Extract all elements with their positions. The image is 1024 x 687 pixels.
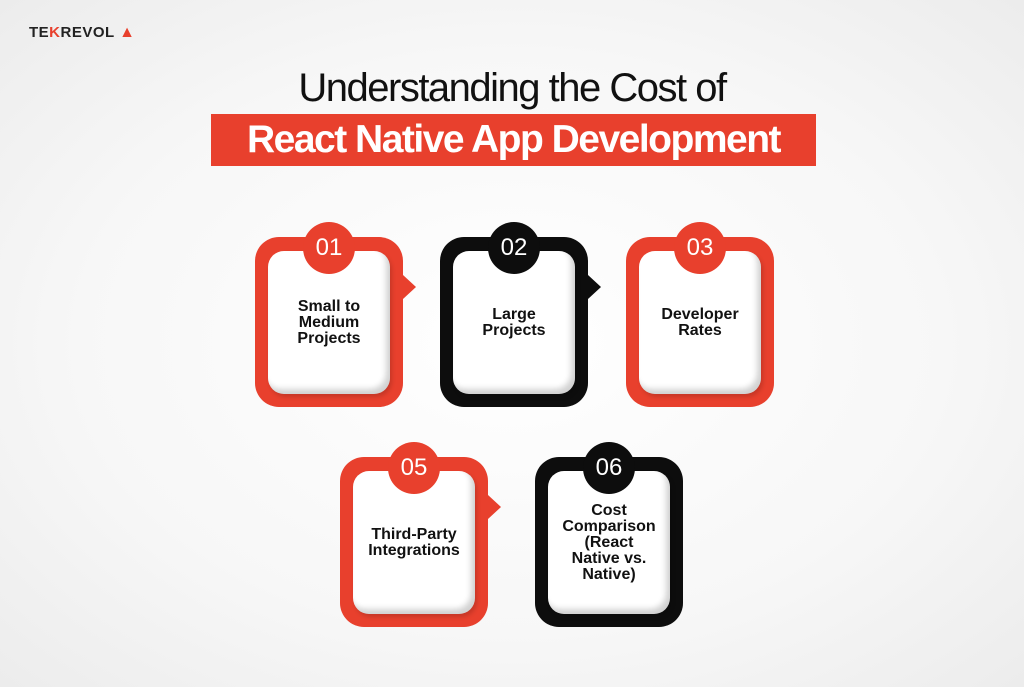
card 05: 05 [401,454,427,481]
title: Understanding the Cost of [298,66,726,110]
logo: TEKREVOL ▲ [29,24,135,41]
card 06: (React [585,534,633,550]
card 02 [440,222,601,407]
card 06: Native) [582,566,636,582]
card 06: Native vs. [572,550,646,566]
card 03: 03 [687,234,713,261]
card 01: Small to [298,298,360,314]
title banner: React Native App Development [247,118,780,161]
card 05: Integrations [368,542,460,558]
card 01: Projects [297,330,361,346]
card 03 [626,222,774,407]
card 06: 06 [596,454,622,481]
card 02: Large [492,306,536,322]
card 06: Cost [591,502,627,518]
card 02: Projects [482,322,546,338]
card 05: Third-Party [371,526,457,542]
card 02: 02 [501,234,527,261]
card 06: Comparison [562,518,656,534]
card 01: 01 [316,234,342,261]
card 01: Medium [299,314,359,330]
card 05 [340,442,501,627]
card 03: Developer [661,306,739,322]
card 01 [255,222,416,407]
card 06 [535,442,683,627]
card 03: Rates [678,322,722,338]
